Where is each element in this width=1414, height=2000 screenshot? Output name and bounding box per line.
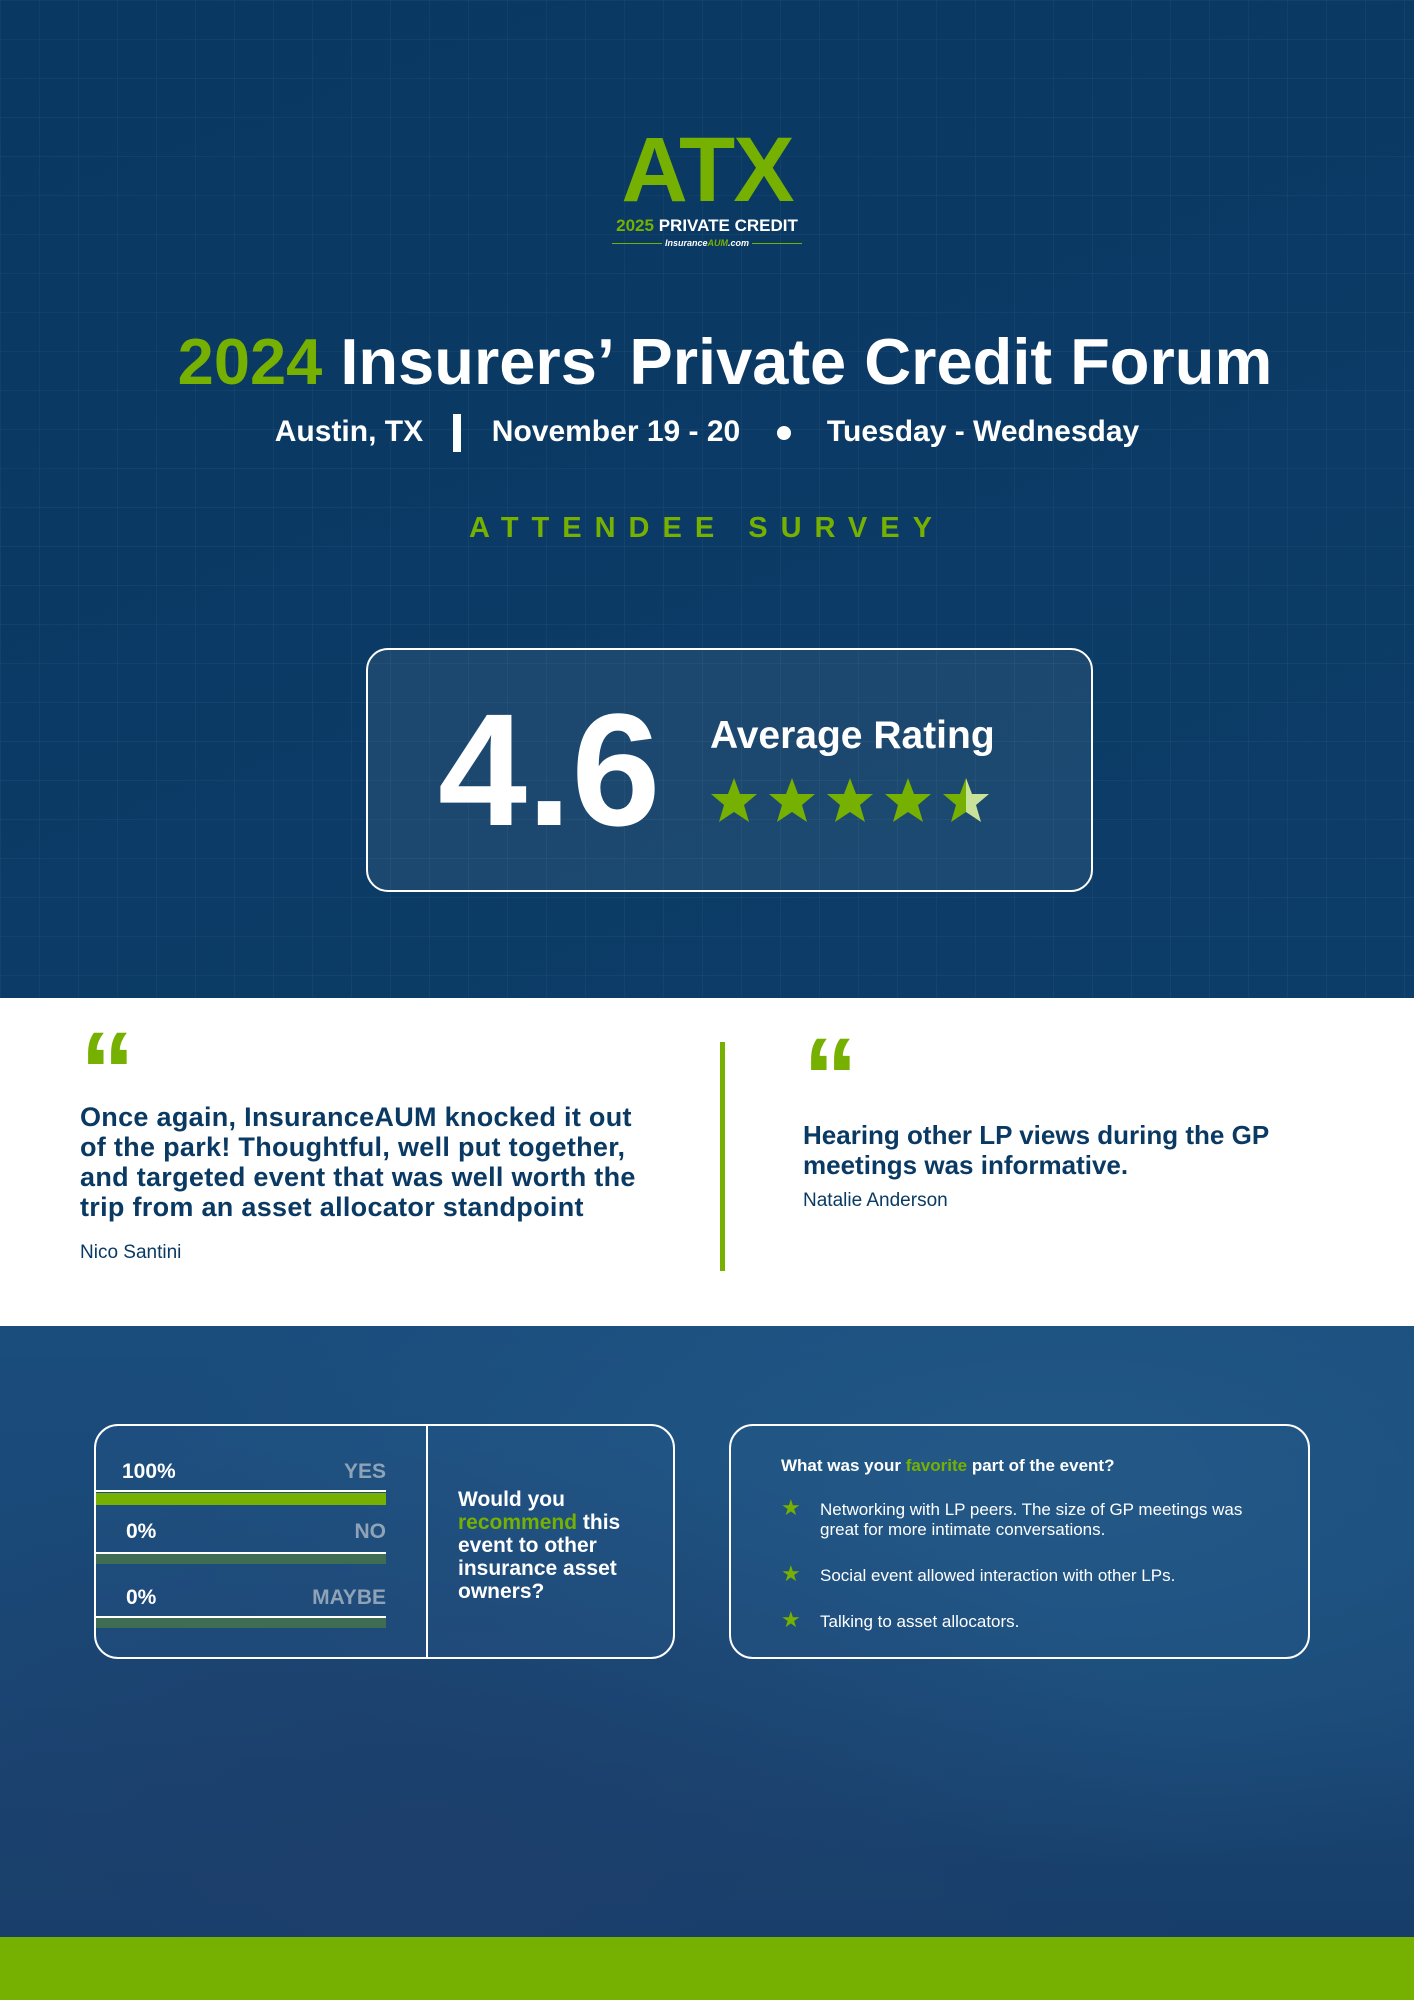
testimonials section xyxy=(0,998,1414,1326)
quote icon: “ xyxy=(803,1016,850,1139)
quote right: Hearing other LP views during the GP meetings was informative. xyxy=(803,1120,1269,1180)
list items: ★ xyxy=(781,1607,801,1632)
logo: ATX xyxy=(621,119,793,221)
quote left xyxy=(80,1010,636,1263)
rating box xyxy=(366,648,1093,892)
bar chart xyxy=(96,1460,386,1628)
bar chart: 0% xyxy=(126,1586,156,1609)
favorite card xyxy=(729,1424,1310,1659)
question: Would you recommend this event to other insurance asset owners? xyxy=(458,1488,620,1603)
bar chart: 0% xyxy=(126,1520,156,1543)
event details: Austin, TX November 19 - 20 Tuesday - Wednesday xyxy=(275,415,1139,448)
list items: ★ xyxy=(781,1495,801,1520)
list items: Talking to asset allocators. xyxy=(820,1612,1019,1631)
big rating number: 4.6 xyxy=(438,680,660,859)
quote left: Nico Santini xyxy=(80,1242,181,1263)
list items xyxy=(781,1495,1242,1632)
list items: ★ xyxy=(781,1561,801,1586)
recommend card xyxy=(94,1424,675,1659)
bar chart: NO xyxy=(354,1520,386,1543)
subtitle: ATTENDEE SURVEY xyxy=(469,512,945,544)
quote right xyxy=(803,1016,1269,1211)
list items: Networking with LP peers. The size of GP meetings was great for more intimate conversations. xyxy=(820,1500,1242,1539)
rating label: Average Rating xyxy=(710,714,995,757)
divider xyxy=(720,1042,725,1271)
title: 2024 Insurers’ Private Credit Forum xyxy=(178,325,1272,398)
logo: 2025 PRIVATE CREDIT xyxy=(616,216,798,235)
footer bar xyxy=(0,1937,1414,2000)
logo: InsuranceAUM.com xyxy=(665,238,749,248)
quote right: Natalie Anderson xyxy=(803,1190,948,1211)
bar chart: YES xyxy=(344,1460,386,1483)
bottom photo section xyxy=(0,1326,1414,1937)
question heading: What was your favorite part of the event? xyxy=(781,1456,1114,1475)
quote left: Once again, InsuranceAUM knocked it out of the park! Thoughtful, well put together, and targeted event that was well worth the trip from an asset allocator standpoint xyxy=(80,1102,636,1222)
quote icon: “ xyxy=(80,1010,127,1133)
bar chart: MAYBE xyxy=(312,1586,386,1609)
bar chart: 100% xyxy=(122,1460,176,1483)
list items: Social event allowed interaction with other LPs. xyxy=(820,1566,1175,1585)
top hero section xyxy=(0,0,1414,998)
stars xyxy=(711,778,989,822)
